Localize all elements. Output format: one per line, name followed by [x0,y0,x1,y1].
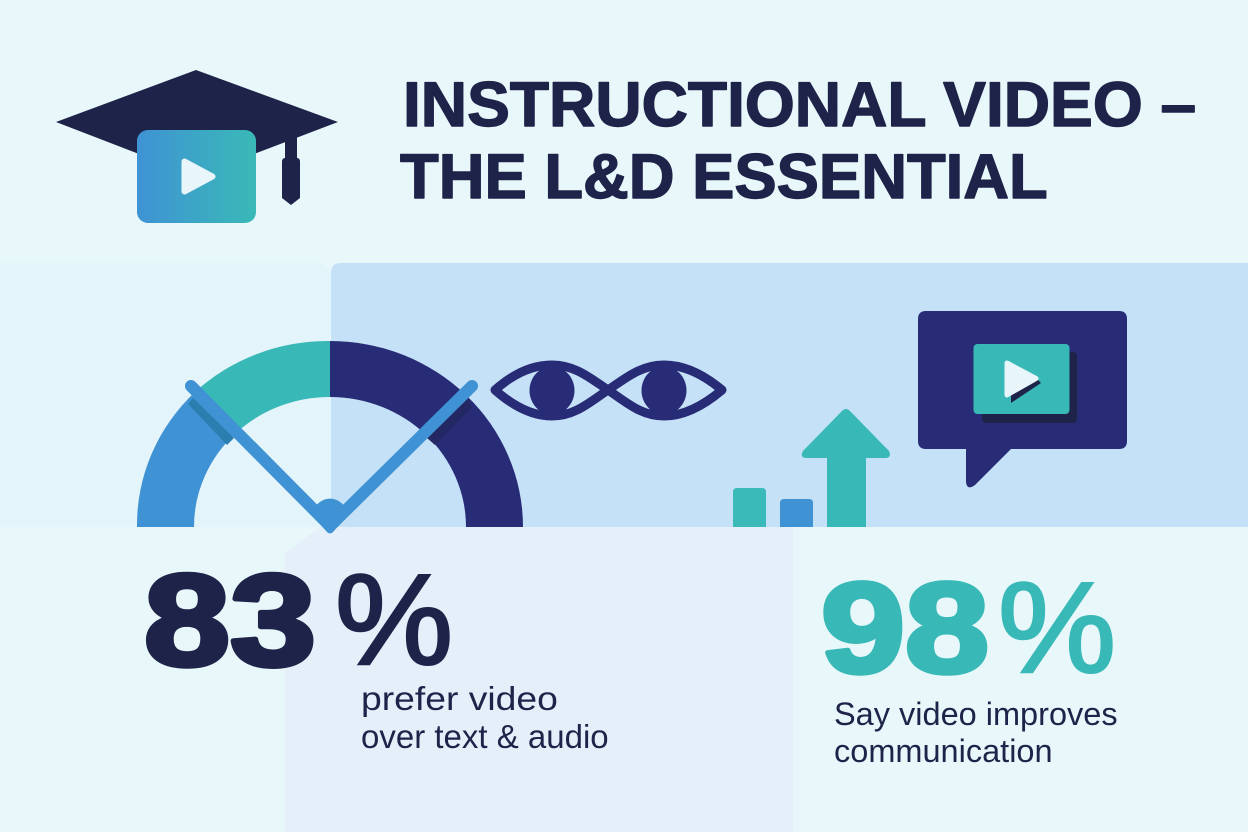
title line 1: INSTRUCTIONAL VIDEO – [403,70,1196,140]
percent sign: % [335,547,453,692]
caption line 1: prefer video [361,681,558,717]
bar teal [733,488,766,527]
gauge segment: teal [195,341,330,432]
chart: semicircular gauge [137,341,523,534]
stat: 83 percent [144,547,609,755]
caption line 1: Say video improves [834,696,1118,732]
value 98: 98 [821,556,989,699]
icon: graduation cap with video [56,70,338,223]
gauge segment: navy [330,341,523,527]
video tile shadow [982,352,1077,423]
stat: 98 percent [821,555,1118,769]
right pupil [642,366,686,414]
eye outlines [495,365,722,416]
bar blue [780,499,813,527]
caption line 2: over text & audio [361,718,609,755]
percent sign: % [998,555,1116,700]
value 83: 83 [144,549,316,693]
panel: right illustration backdrop [331,263,1248,527]
icon: speech bubble with video [918,311,1127,487]
icon: pair of eyes [495,365,722,416]
panel: bottom centre stat backdrop [285,527,793,832]
gauge segment: blue [137,392,236,527]
cap board [56,70,338,176]
play shadow [1011,378,1041,403]
play button [1007,363,1036,395]
needle shadow right [427,398,472,445]
cap tassel [282,133,300,205]
title line 2: THE L&D ESSENTIAL [400,142,1048,212]
caption line 2: communication [834,733,1053,769]
icon: growth bars and arrow [733,409,890,527]
needle strokes [191,386,472,526]
left pupil [530,366,574,414]
play button [184,162,212,192]
up arrow [802,409,890,527]
bubble [918,311,1127,487]
needle shadow left [188,398,234,445]
video tile [137,130,256,223]
panel: left gauge backdrop [0,263,330,527]
video tile [974,344,1070,414]
needle hub [310,499,350,534]
title [400,70,1196,212]
